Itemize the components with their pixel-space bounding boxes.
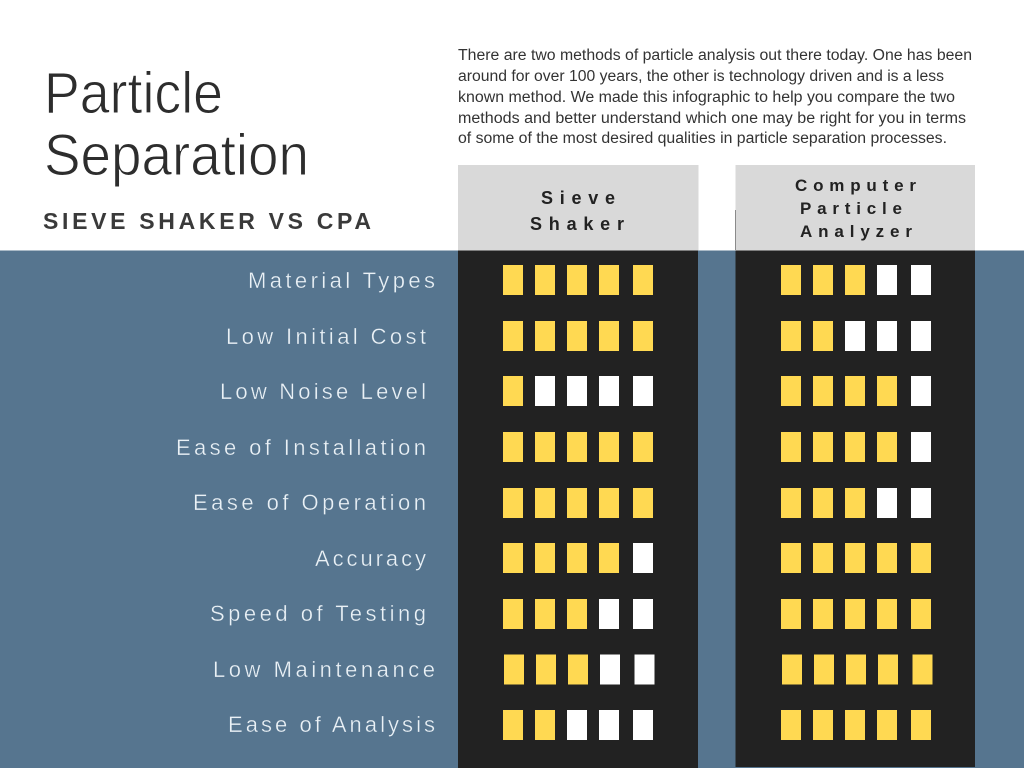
rating: low initial cost 2 of 5 <box>781 321 931 351</box>
sieve shaker header: Shaker <box>530 214 624 234</box>
title: Separation <box>44 123 309 188</box>
subtitle: SIEVE SHAKER VS CPA <box>43 208 371 234</box>
blue background band <box>0 250 1024 768</box>
label: ease of operation: Ease of Operation <box>193 490 426 515</box>
cpa header: Computer <box>795 176 916 195</box>
label: material types: Material Types <box>248 268 435 293</box>
title: Particle <box>44 61 223 126</box>
rating: accuracy 5 of 5 <box>781 543 931 573</box>
rating: low noise level 4 of 5 <box>781 376 931 406</box>
rating: low noise level 1 of 5 <box>503 376 653 406</box>
intro paragraph: There are two methods of particle analysis out there today. One has been <box>458 47 972 64</box>
criteria labels <box>176 268 435 737</box>
rating: accuracy 4 of 5 <box>503 543 653 573</box>
rating: low initial cost 5 of 5 <box>503 321 653 351</box>
intro paragraph: of some of the most desired qualities in particle separation processes. <box>458 130 947 147</box>
cpa header: Particle <box>800 199 902 218</box>
label: accuracy: Accuracy <box>315 546 426 571</box>
intro paragraph: known method. We made this infographic to help you compare the two <box>458 89 955 106</box>
title <box>44 61 309 188</box>
panel: computer particle analyzer <box>735 165 975 767</box>
intro paragraph: methods and better understand which one may be right for you in terms <box>458 110 966 127</box>
rating: ease of installation 4 of 5 <box>781 432 931 462</box>
cpa header <box>735 165 975 250</box>
cpa column background <box>736 250 975 767</box>
intro paragraph: around for over 100 years, the other is technology driven and is a less <box>458 68 944 85</box>
rating: ease of analysis 5 of 5 <box>781 710 931 740</box>
panel: sieve shaker <box>458 165 698 768</box>
sieve shaker header <box>458 165 698 250</box>
sieve shaker column background <box>458 250 698 768</box>
rating: low maintenance 3 of 5 <box>504 654 654 684</box>
label: ease of installation: Ease of Installation <box>176 435 426 460</box>
cpa header: Analyzer <box>800 222 912 241</box>
rating: low maintenance 5 of 5 <box>782 654 932 684</box>
rating: speed of testing 5 of 5 <box>781 599 931 629</box>
rating: ease of installation 5 of 5 <box>503 432 653 462</box>
rating: material types 3 of 5 <box>781 265 931 295</box>
sieve shaker header: Sieve <box>541 188 615 208</box>
label: low initial cost: Low Initial Cost <box>226 324 426 349</box>
intro paragraph <box>458 47 972 147</box>
label: low maintenance: Low Maintenance <box>213 657 435 682</box>
rating: speed of testing 3 of 5 <box>503 599 653 629</box>
rating: ease of operation 3 of 5 <box>781 488 931 518</box>
label: speed of testing: Speed of Testing <box>210 601 426 626</box>
rating: ease of analysis 2 of 5 <box>503 710 653 740</box>
rating: material types 5 of 5 <box>503 265 653 295</box>
rating: ease of operation 5 of 5 <box>503 488 653 518</box>
label: low noise level: Low Noise Level <box>220 379 426 404</box>
label: ease of analysis: Ease of Analysis <box>228 712 435 737</box>
